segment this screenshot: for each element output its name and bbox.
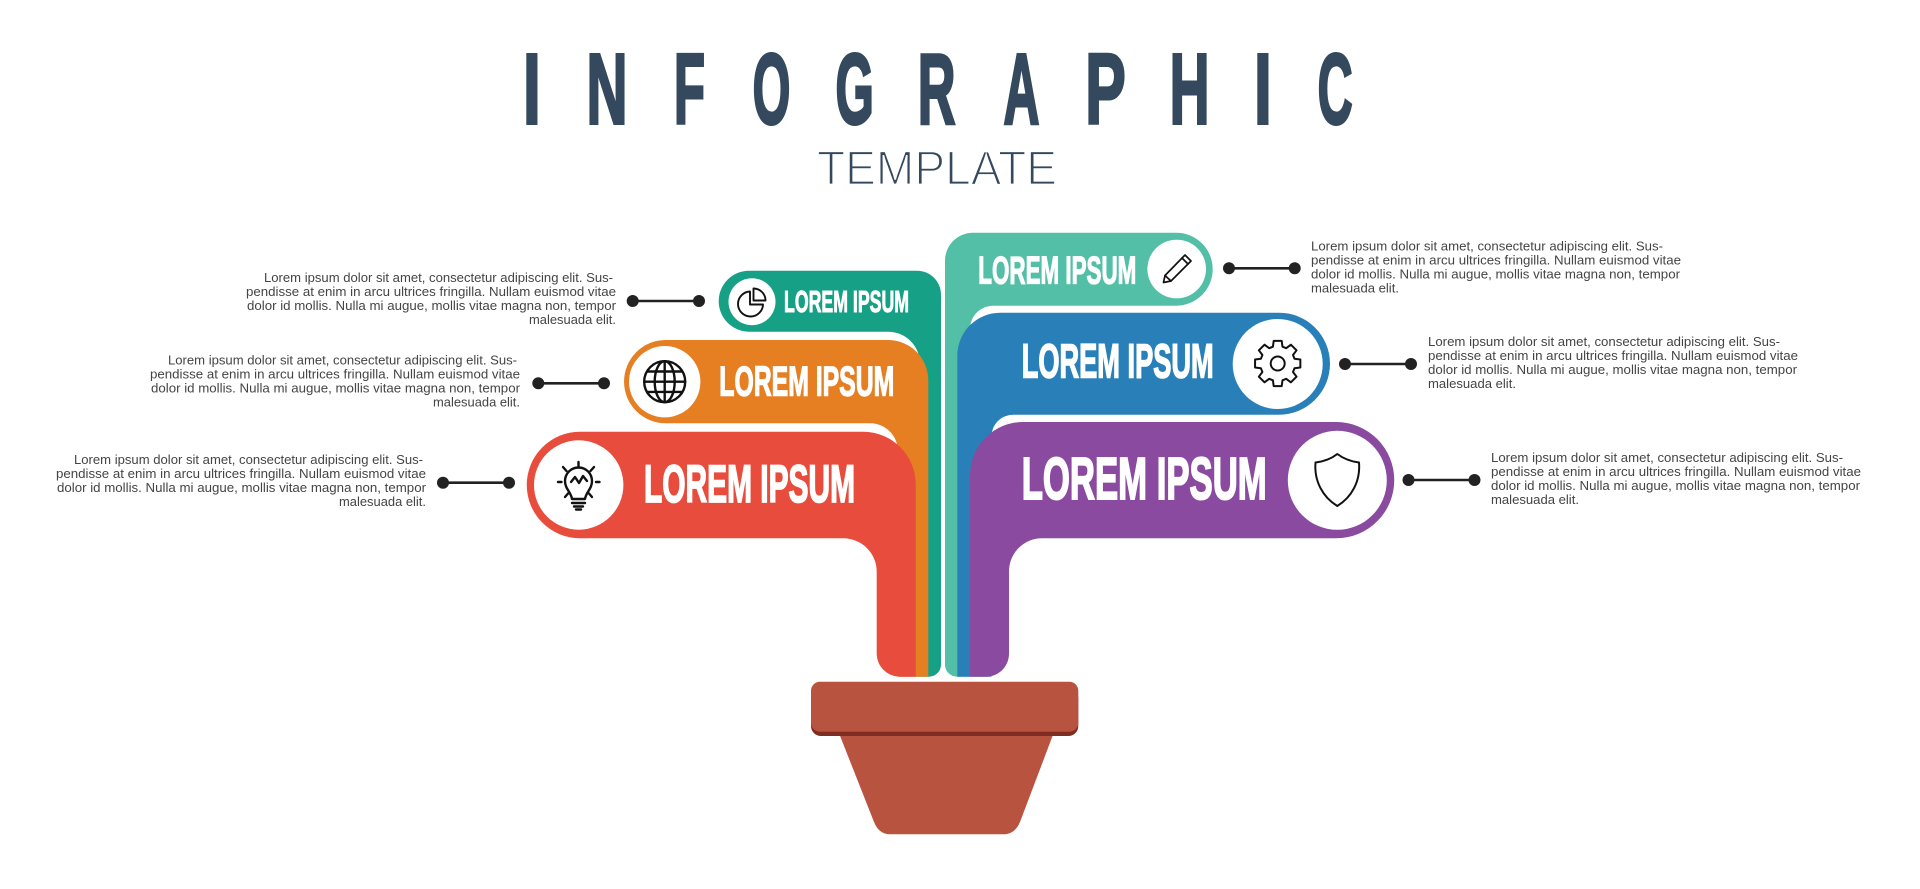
text block: red left: pendisse at enim in arcu ultrices fringilla. Nullam euismod vitae [56,466,426,481]
text block: blue right: pendisse at enim in arcu ultrices fringilla. Nullam euismod vitae [1428,348,1798,363]
text block: light teal right: malesuada elit. [1311,280,1399,296]
text block: red left: Lorem ipsum dolor sit amet, consectetur adipiscing elit. Sus- [74,452,423,467]
text block: orange left: Lorem ipsum dolor sit amet, consectetur adipiscing elit. Sus- [168,352,517,368]
text block: orange left: malesuada elit. [433,394,520,410]
panel: light teal right branch: LOREM IPSUM [978,249,1136,292]
text block: teal left: pendisse at enim in arcu ultrices fringilla. Nullam euismod vitae [246,284,616,299]
text block: teal left [246,270,617,327]
connector: red left [437,477,515,489]
panel: red left branch [527,432,916,677]
panel: purple right branch [970,422,1394,677]
text block: blue right: malesuada elit. [1428,376,1516,391]
text block: red left [56,452,427,509]
text block: red left: malesuada elit. [339,494,426,509]
text block: purple right: pendisse at enim in arcu ultrices fringilla. Nullam euismod vitae [1491,464,1861,479]
text block: teal left: malesuada elit. [529,312,616,327]
title: I [1254,34,1272,146]
panel: light teal right branch [945,233,1213,677]
connector: purple right [1402,474,1480,486]
text block: light teal right: Lorem ipsum dolor sit amet, consectetur adipiscing elit. Sus- [1311,238,1663,254]
text block: teal left: dolor id mollis. Nulla mi augue, mollis vitae magna non, tempor [247,298,617,313]
text block: light teal right [1311,238,1681,296]
title: N [586,34,628,146]
icon: globe [644,361,685,402]
panel: blue right branch [957,313,1330,677]
text block: blue right [1428,334,1798,391]
panel: teal left branch: LOREM IPSUM [784,285,909,319]
panel: blue right branch: LOREM IPSUM [1022,336,1214,388]
text block: blue right: Lorem ipsum dolor sit amet, consectetur adipiscing elit. Sus- [1428,334,1780,349]
title: P [1085,34,1126,146]
icon: shield [1315,454,1359,506]
icon: gear [1255,341,1300,386]
panel: teal left branch [719,271,941,677]
icon: pie chart [738,288,766,316]
title: R [918,34,956,146]
text block: purple right: Lorem ipsum dolor sit amet, consectetur adipiscing elit. Sus- [1491,450,1843,465]
text: C [1318,34,1353,146]
connector: orange left [532,377,610,389]
title: F [674,34,705,146]
text block: red left: dolor id mollis. Nulla mi augue, mollis vitae magna non, tempor [57,480,427,495]
text block: orange left: pendisse at enim in arcu ultrices fringilla. Nullam euismod vitae [150,366,520,382]
text block: purple right [1491,450,1861,507]
title: A [1004,34,1040,146]
title: I [523,34,541,146]
text block: orange left [150,352,521,410]
title: H [1170,34,1210,146]
text block: purple right: malesuada elit. [1491,492,1579,507]
panel: orange left branch: LOREM IPSUM [719,357,894,404]
icon: pencil [1164,255,1191,282]
connector: light teal right [1223,262,1301,274]
title [523,34,1353,146]
title: O [753,34,790,146]
panel: orange left branch [624,340,928,677]
panel: red left branch: LOREM IPSUM [644,455,855,514]
icon: light bulb [558,462,600,510]
connector: blue right [1339,358,1417,370]
title: G [836,34,874,146]
subtitle: TEMPLATE [817,142,1057,196]
pot [811,682,1078,834]
text block: orange left: dolor id mollis. Nulla mi augue, mollis vitae magna non, tempor [151,380,521,396]
text block: light teal right: pendisse at enim in arcu ultrices fringilla. Nullam euismod vitae [1311,252,1681,268]
text block: light teal right: dolor id mollis. Nulla mi augue, mollis vitae magna non, tempor [1311,266,1681,282]
panel: purple right branch: LOREM IPSUM [1022,445,1267,512]
text block: blue right: dolor id mollis. Nulla mi augue, mollis vitae magna non, tempor [1428,362,1798,377]
text block: teal left: Lorem ipsum dolor sit amet, consectetur adipiscing elit. Sus- [264,270,613,285]
text block: purple right: dolor id mollis. Nulla mi augue, mollis vitae magna non, tempor [1491,478,1861,493]
connector: teal left [627,295,705,307]
